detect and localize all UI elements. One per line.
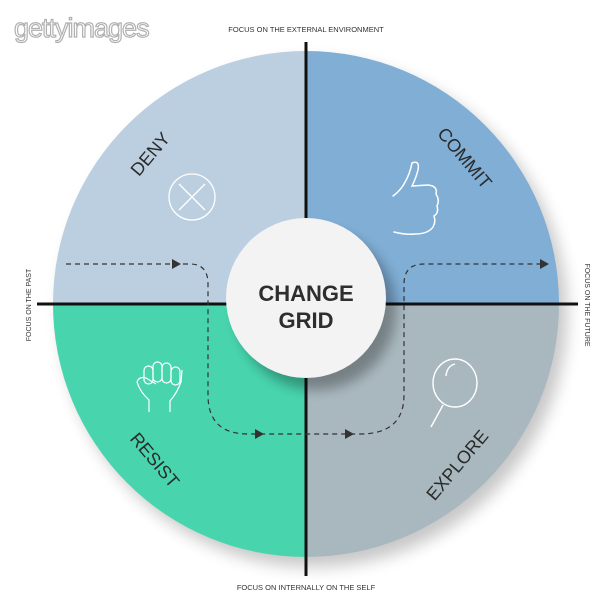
top label: FOCUS ON THE EXTERNAL ENVIRONMENT: [228, 25, 384, 34]
right label: FOCUS ON THE FUTURE: [583, 263, 590, 347]
icon: magnifier: [431, 359, 477, 427]
center circle: GRID: [278, 308, 334, 333]
center circle shadow: [236, 230, 396, 390]
quadrant: commit: [306, 51, 559, 304]
label: deny: DENY: [127, 129, 174, 180]
quadrant: resist: [53, 304, 306, 558]
bottom label: FOCUS ON INTERNALLY ON THE SELF: [237, 583, 376, 592]
circle shadow: [61, 61, 567, 567]
center circle: CHANGE: [258, 281, 354, 306]
label: explore: EXPLORE: [422, 426, 492, 504]
watermark: gettyimages: [14, 13, 149, 43]
dashed path arrow: [66, 264, 545, 434]
label: resist: RESIST: [126, 429, 183, 491]
label: commit: COMMIT: [433, 124, 496, 193]
quadrant: deny: [53, 51, 306, 304]
axes: [37, 42, 578, 576]
center circle: [226, 218, 386, 378]
main circle quadrants: [53, 51, 559, 558]
quadrant: explore: [306, 304, 559, 558]
left label: FOCUS ON THE PAST: [26, 268, 33, 341]
icon: thumbs up: [393, 162, 438, 234]
arrowheads: [172, 259, 549, 439]
icon: x circle: [169, 174, 215, 220]
icon: fist: [137, 362, 182, 412]
